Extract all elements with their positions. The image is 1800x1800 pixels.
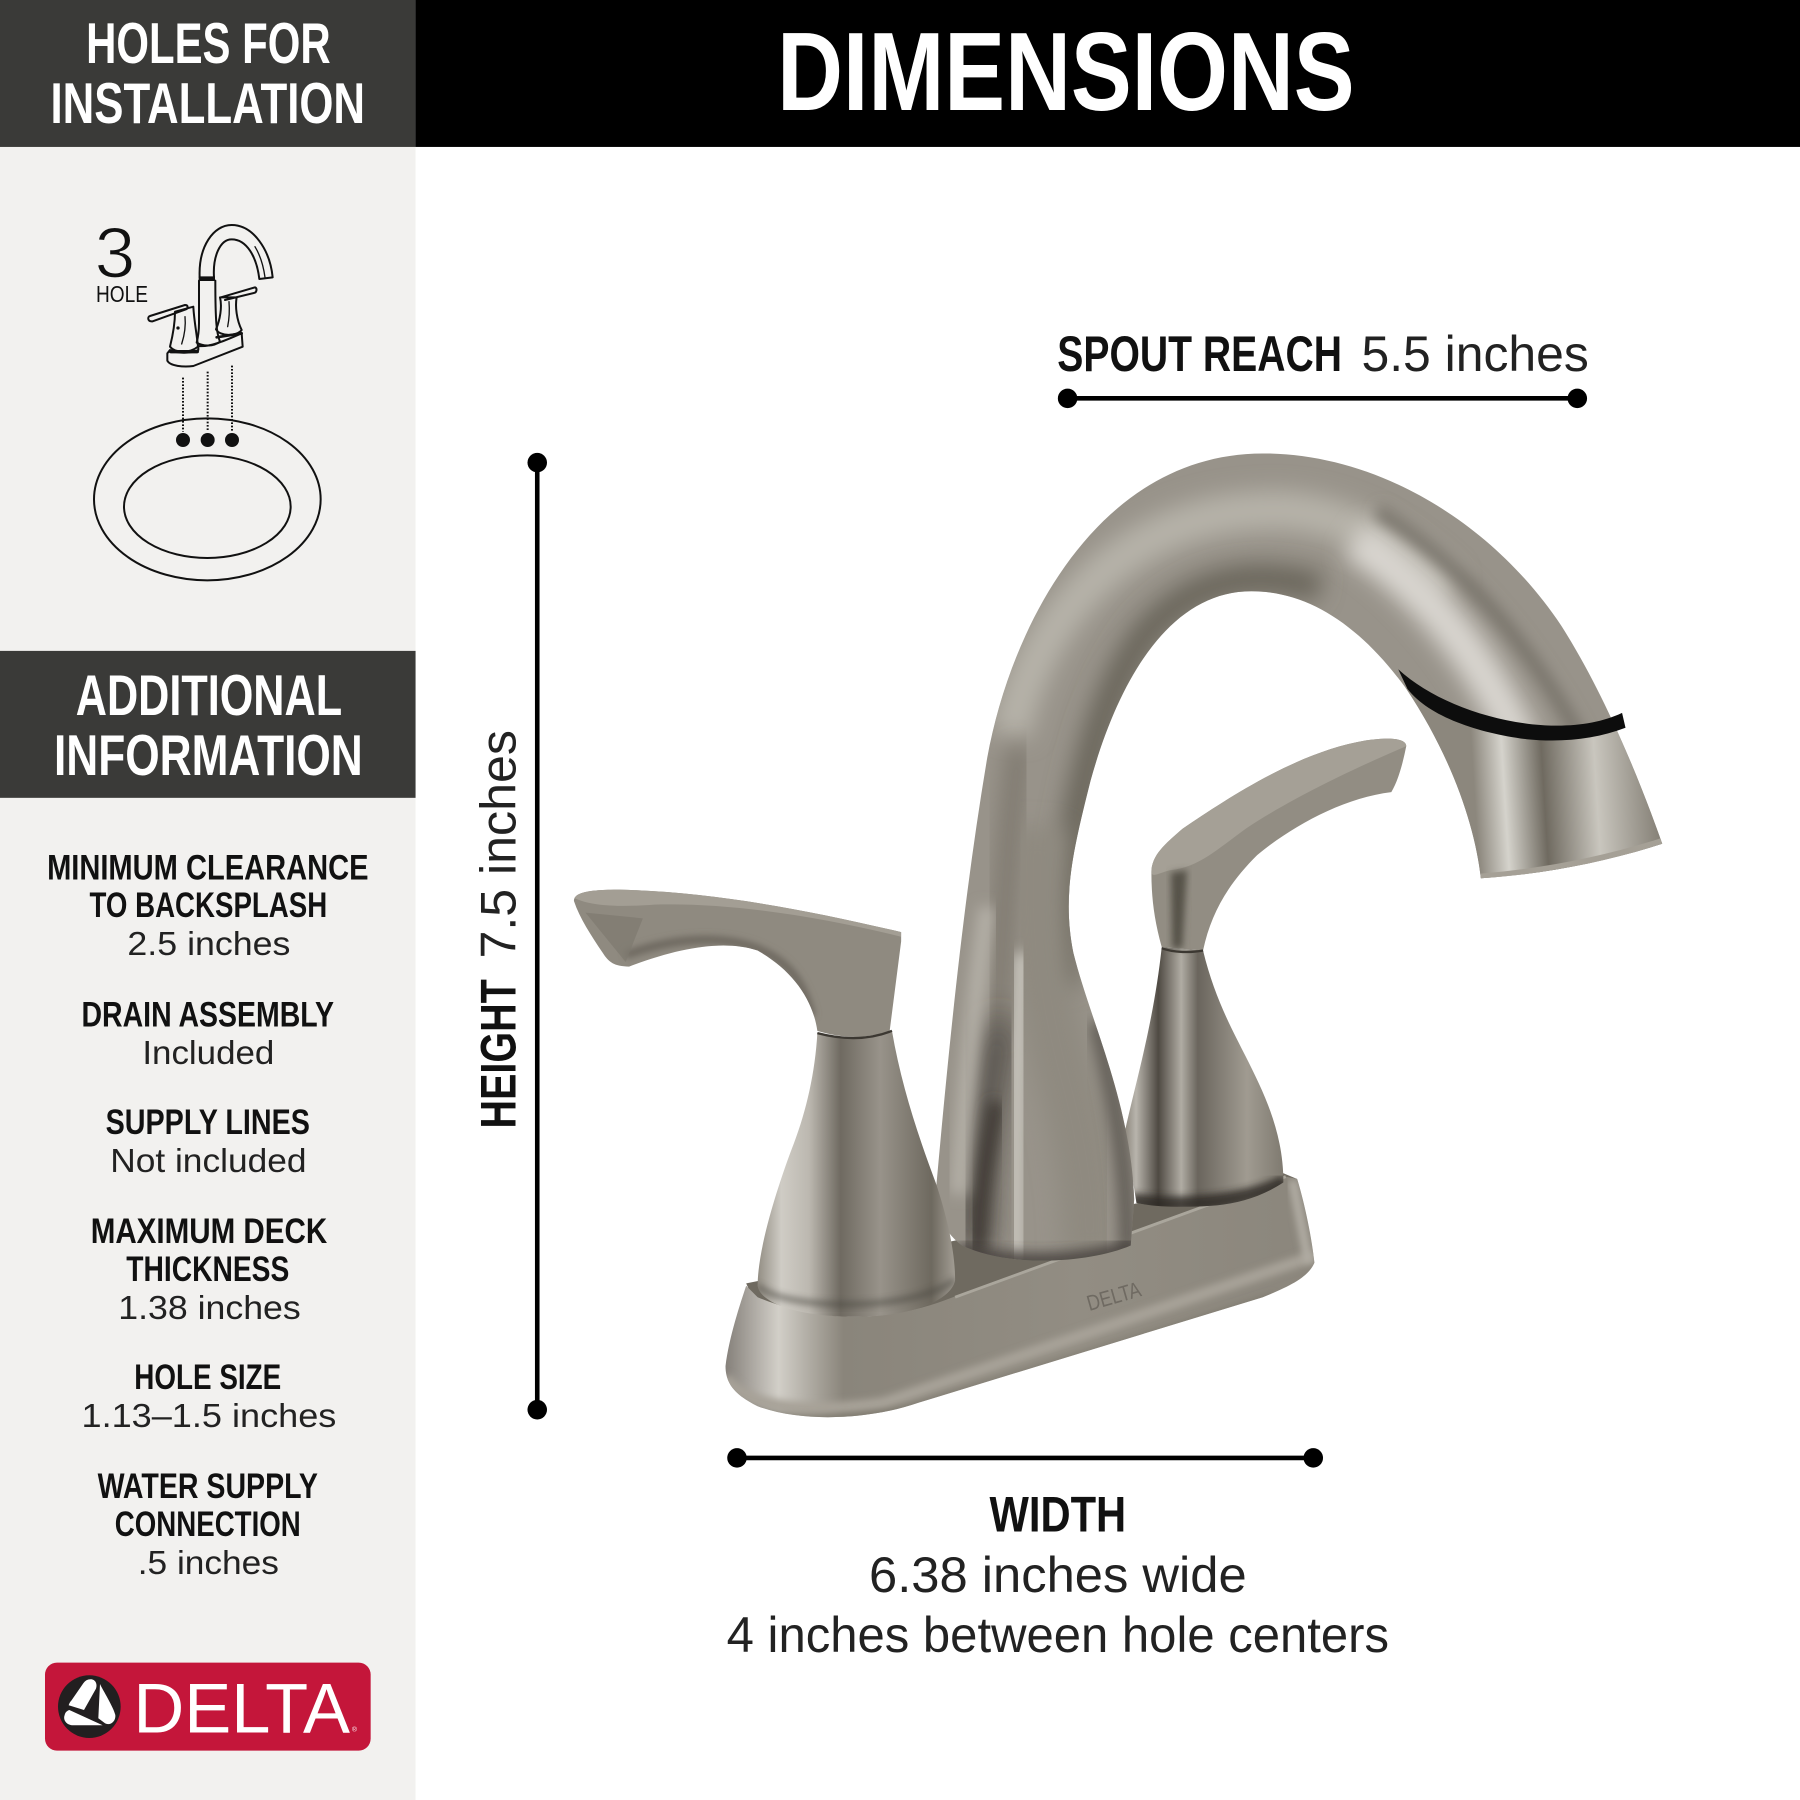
faucet base plate: DELTA <box>1084 1276 1144 1316</box>
text block: maximum deck thickness: THICKNESS <box>126 1249 289 1289</box>
text block: minimum clearance to backsplash: TO BACKSPLASH <box>90 885 327 925</box>
text block: supply lines <box>106 1102 310 1180</box>
text block: supply lines: Not included <box>110 1143 307 1180</box>
icon: three hole faucet over sink <box>94 213 321 580</box>
logo: delta <box>45 1663 371 1751</box>
icon: three hole faucet over sink: 3 <box>95 213 135 293</box>
dimension: spout reach <box>1057 325 1589 408</box>
faucet black stripe <box>1398 669 1626 741</box>
text block: hole size: HOLE SIZE <box>134 1357 281 1397</box>
faucet illustration <box>574 453 1688 1419</box>
text block: water supply connection: .5 inches <box>138 1545 279 1582</box>
text block: water supply connection: WATER SUPPLY <box>98 1466 318 1506</box>
dimension: width <box>727 1448 1389 1663</box>
dimension: height <box>469 453 547 1419</box>
dimension: width: 4 inches between hole centers <box>727 1606 1389 1663</box>
heading: holes for installation: INSTALLATION <box>51 72 365 136</box>
heading: holes for installation <box>0 0 416 147</box>
text block: minimum clearance to backsplash <box>47 847 368 963</box>
title: dimensions: DIMENSIONS <box>777 9 1355 134</box>
dimension: spout reach: 5.5 inches <box>1361 325 1589 382</box>
text block: water supply connection <box>98 1466 318 1582</box>
text block: hole size <box>82 1357 336 1435</box>
faucet base plate <box>726 1173 1314 1419</box>
text block: minimum clearance to backsplash: 2.5 inches <box>127 926 290 963</box>
heading: holes for installation: HOLES FOR <box>86 12 331 76</box>
text block: supply lines: SUPPLY LINES <box>106 1102 310 1142</box>
dimension: spout reach: SPOUT REACH <box>1057 325 1342 382</box>
title: dimensions <box>416 0 1800 147</box>
panel: left sidebar <box>0 0 416 1800</box>
dimension: height: HEIGHT <box>469 979 526 1128</box>
text block: hole size: 1.13–1.5 inches <box>82 1398 336 1435</box>
heading: additional information: INFORMATION <box>54 724 363 788</box>
text block: maximum deck thickness: 1.38 inches <box>118 1290 301 1327</box>
text block: drain assembly <box>82 994 334 1072</box>
text block: minimum clearance to backsplash: MINIMUM CLEARANCE <box>47 847 368 887</box>
text block: maximum deck thickness <box>91 1211 327 1327</box>
heading: additional information <box>0 651 416 798</box>
text block: maximum deck thickness: MAXIMUM DECK <box>91 1211 327 1251</box>
logo: delta: DELTA <box>133 1668 350 1747</box>
faucet left handle <box>574 872 955 1317</box>
dimension: height: 7.5 inches <box>469 730 526 959</box>
text block: drain assembly: Included <box>142 1035 274 1072</box>
text block: water supply connection: CONNECTION <box>115 1504 301 1544</box>
icon: three hole faucet over sink: HOLE <box>96 281 148 307</box>
heading: additional information: ADDITIONAL <box>76 664 342 728</box>
logo: delta: ® <box>352 1726 357 1734</box>
dimension: width: 6.38 inches wide <box>869 1546 1247 1603</box>
faucet spout <box>936 453 1688 1261</box>
text block: drain assembly: DRAIN ASSEMBLY <box>82 994 334 1034</box>
dimension: width: WIDTH <box>990 1485 1126 1542</box>
faucet right handle <box>1125 739 1406 1207</box>
